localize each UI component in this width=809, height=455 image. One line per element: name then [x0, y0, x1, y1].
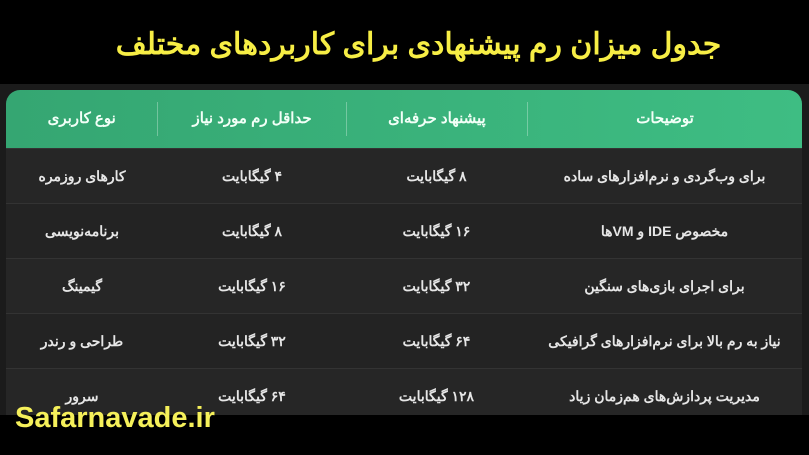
- row: daily: برای وب‌گردی و نرم‌افزارهای ساده: [564, 168, 765, 184]
- table header: توضیحات: [636, 110, 694, 127]
- table header: حداقل رم مورد نیاز: [193, 110, 312, 127]
- row: server: ۶۴ گیگابایت: [218, 388, 286, 404]
- table: [6, 90, 802, 415]
- row: design: ۳۲ گیگابایت: [218, 332, 286, 348]
- row: gaming: [6, 258, 802, 313]
- row: daily: ۸ گیگابایت: [406, 168, 467, 184]
- row: gaming: برای اجرای بازی‌های سنگین: [584, 278, 745, 294]
- row: design: ۶۴ گیگابایت: [403, 332, 470, 348]
- table header: نوع کاربری: [48, 110, 116, 127]
- row: server: سرور: [66, 388, 98, 404]
- row: daily: [6, 148, 802, 203]
- row: design: [6, 313, 802, 368]
- row: daily: کارهای روزمره: [38, 168, 126, 184]
- watermark: Safarnavade.ir: [15, 402, 215, 434]
- row: gaming: ۳۲ گیگابایت: [403, 278, 470, 294]
- row: server: مدیریت پردازش‌های هم‌زمان زیاد: [569, 388, 760, 404]
- row: daily: ۴ گیگابایت: [222, 168, 282, 184]
- row: programming: [6, 203, 802, 258]
- table header: پیشنهاد حرفه‌ای: [388, 110, 486, 127]
- row: design: نیاز به رم بالا برای نرم‌افزارهای گرافیکی: [548, 332, 781, 348]
- table header: [6, 90, 802, 148]
- row: design: طراحی و رندر: [41, 332, 123, 348]
- row: server: ۱۲۸ گیگابایت: [399, 388, 474, 404]
- title: جدول میزان رم پیشنهادی برای کاربردهای مختلف: [116, 28, 721, 61]
- row: programming: ۸ گیگابایت: [222, 222, 282, 238]
- row: programming: برنامه‌نویسی: [45, 222, 119, 238]
- row: gaming: ۱۶ گیگابایت: [218, 278, 286, 294]
- row: programming: مخصوص IDE و VMها: [601, 222, 728, 238]
- row: programming: ۱۶ گیگابایت: [403, 222, 470, 238]
- row: server: [6, 368, 802, 423]
- row: gaming: گیمینگ: [62, 278, 102, 294]
